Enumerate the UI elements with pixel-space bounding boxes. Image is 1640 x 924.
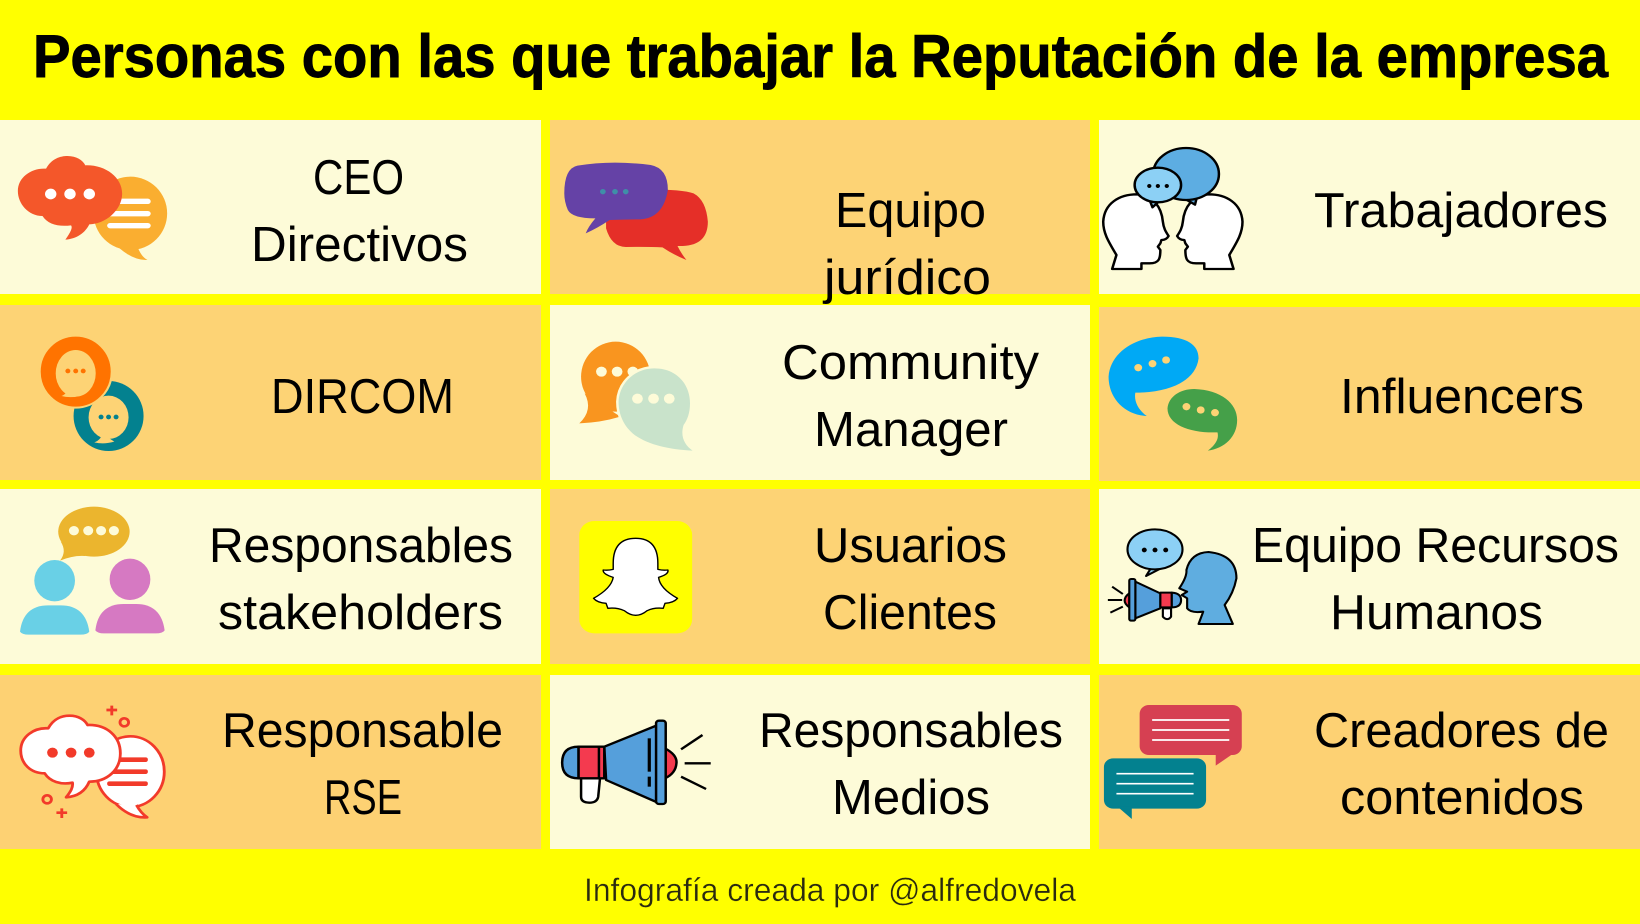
label: Equipo jurídico: jurídico [822, 251, 991, 305]
label: Responsables stakeholders [209, 519, 513, 640]
label: CEO Directivos [251, 151, 468, 272]
label: Community Manager: Manager [814, 403, 1008, 457]
label: CEO Directivos: CEO [313, 151, 404, 205]
icon: yellow ghost app [579, 521, 692, 633]
panel: Community Manager [550, 305, 1090, 480]
panel: DIRCOM [0, 305, 541, 480]
label: Usuarios Clientes: Usuarios [814, 519, 1007, 573]
label: Community Manager: Community [782, 336, 1040, 390]
label: Responsables Medios: Responsables [759, 704, 1063, 758]
label: DIRCOM: DIRCOM [271, 370, 454, 424]
label: Responsables stakeholders: stakeholders [218, 586, 503, 640]
icon: orange and teal ring bubbles [40, 336, 144, 451]
label: Responsables Medios: Medios [832, 771, 990, 825]
icon: red and teal message boxes [1104, 705, 1242, 819]
icon: megaphone [562, 721, 711, 804]
icon: purple and red speech bubbles [564, 163, 708, 260]
panel: Equipo Recursos Humanos [1099, 489, 1640, 664]
panel: Equipo jurídico [550, 120, 1090, 294]
icon: two heads talking [1103, 148, 1242, 269]
panel: Trabajadores [1099, 120, 1640, 294]
panel: CEO Directivos [0, 120, 541, 294]
icon: orange and pale green bubbles [579, 342, 692, 451]
label: Community Manager [782, 336, 1040, 457]
label: Creadores de contenidos: contenidos [1340, 771, 1584, 825]
label: Responsable RSE [222, 704, 503, 825]
panel: Usuarios Clientes [550, 489, 1090, 664]
panel: Responsables Medios [550, 675, 1090, 849]
label: Responsables stakeholders: Responsables [209, 519, 513, 573]
label: Equipo Recursos Humanos: Humanos [1330, 586, 1543, 640]
label: Equipo Recursos Humanos: Equipo Recursos [1252, 519, 1619, 573]
icon: outlined red speech bubbles [21, 706, 164, 818]
panel: Responsables stakeholders [0, 489, 541, 664]
label: Creadores de contenidos: Creadores de [1314, 704, 1609, 758]
label: Influencers: Influencers [1340, 370, 1584, 424]
label: Equipo Recursos Humanos [1252, 519, 1619, 640]
label: Equipo jurídico: Equipo [835, 184, 986, 238]
label: Equipo jurídico [822, 184, 991, 305]
icon: head with megaphone [1108, 529, 1236, 624]
footer credit: Infografía creada por @alfredovela [584, 872, 1076, 908]
label: Trabajadores: Trabajadores [1314, 184, 1608, 238]
icon: two people with speech bubble [20, 507, 165, 635]
panel: Influencers [1099, 307, 1640, 481]
icon: red cloud and orange speech bubbles [18, 156, 167, 260]
label: CEO Directivos: Directivos [251, 218, 468, 272]
panel: Responsable RSE [0, 675, 541, 849]
label: Usuarios Clientes [814, 519, 1007, 640]
label: Responsable RSE: RSE [324, 771, 402, 825]
label: Responsables Medios [759, 704, 1063, 825]
label: Responsable RSE: Responsable [222, 704, 503, 758]
panel: Creadores de contenidos [1099, 675, 1640, 849]
icon: blue and green speech bubbles [1109, 337, 1237, 451]
label: Usuarios Clientes: Clientes [823, 586, 997, 640]
label: Creadores de contenidos [1314, 704, 1609, 825]
